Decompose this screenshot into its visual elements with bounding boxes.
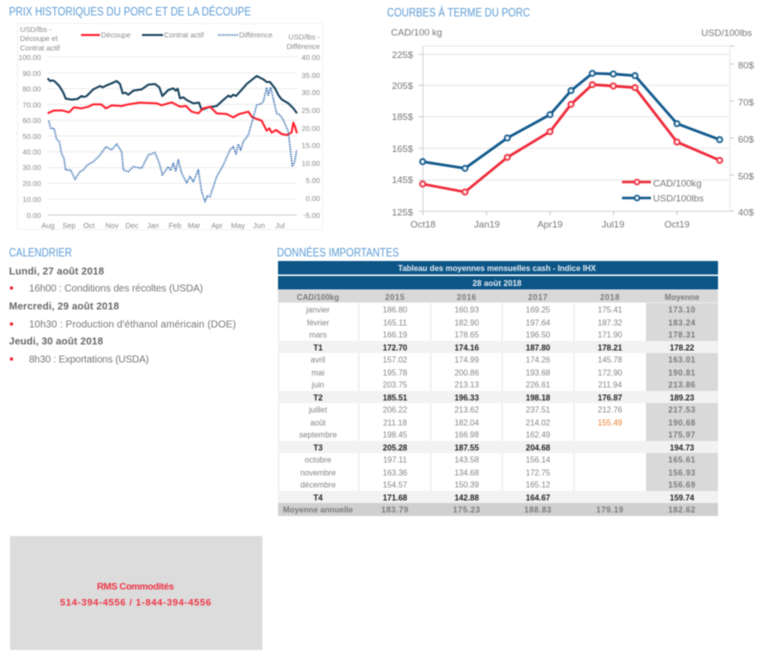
Q1 rows: 182.90 [454,318,479,328]
right axis labels: -5.00 [303,211,320,220]
table: moyennes mensuelles cash [278,261,718,516]
Q2 rows: 185.51 [383,394,408,402]
left axis labels: 205$ [392,81,414,92]
legend: CAD/100kg [653,178,702,190]
axis titles right [286,32,321,51]
Q2 rows: 174.26 [526,356,551,364]
Q1 rows: 187.32 [598,318,623,328]
Q1 rows: 178.31 [668,330,696,340]
Q2 rows [311,356,696,402]
left axis labels: 0.00 [27,211,41,220]
month labels: Jul19 [602,220,624,230]
axis titles left: USD/lbs - [20,25,52,34]
legend [622,178,704,204]
month labels: Jun [253,221,265,230]
Q3 rows: 212.76 [598,406,623,414]
Q4 rows: 165.61 [668,456,696,464]
calendar list: Lundi, 27 août 2018 [9,266,104,278]
legend: USD/100lbs [653,194,704,204]
Q2 rows: 200.86 [454,368,479,378]
Q1 rows: 197.64 [526,318,551,328]
Q1 rows: 166.19 [383,330,408,340]
header row: CAD/100kg [297,293,339,302]
month labels: Oct18 [410,220,436,230]
axis titles right: Différence [286,42,320,51]
heading: calendrier: CALENDRIER [9,248,72,260]
calendar list [9,266,236,366]
Q3 rows: août [310,418,327,428]
Q1 rows: 175.41 [598,306,623,314]
header row: 2018 [600,293,620,302]
left axis labels: 145$ [392,175,414,186]
Q4 rows: 156.69 [668,480,696,490]
Q4 rows: octobre [305,456,332,464]
Q4 rows: 143.58 [454,456,479,464]
Q4 rows: 159.74 [670,494,695,502]
Q4 rows [300,456,696,502]
Q3 rows: T3 [313,444,323,452]
Q2 rows: avril [311,356,326,364]
line: contrat actif [48,76,297,113]
Q2 rows: 174.99 [454,356,479,364]
month labels: Apr19 [537,220,563,230]
Q3 rows: 190.68 [668,418,696,428]
Q2 rows: 213.86 [668,380,696,390]
left axis labels: 70.00 [22,100,41,110]
Q3 rows: 187.55 [454,444,479,452]
Q1 rows: 172.70 [383,344,408,352]
left axis labels: 165$ [392,144,414,155]
Q2 rows: 176.87 [598,394,623,402]
right axis labels: 40$ [738,208,755,218]
Q3 rows: 214.02 [526,418,551,428]
left axis labels: 10.00 [22,195,41,204]
Q1 rows: 183.24 [668,318,696,328]
Q1 rows: 178.22 [670,344,695,352]
Q1 rows: 178.21 [598,344,623,352]
header row: 2016 [457,293,477,302]
left axis labels: 40.00 [22,148,41,156]
heading: prix historiques: PRIX HISTORIQUES DU PORC ET DE LA DÉCOUPE [9,6,251,18]
shaded rows and columns [278,290,718,516]
Q3 rows: 166.98 [454,430,479,440]
left axis labels: 20.00 [22,179,41,188]
Q2 rows: 172.90 [598,368,623,378]
month labels [410,220,690,230]
line: USD/100lbs [420,71,722,171]
Q2 rows: 190.81 [668,368,696,378]
Q3 rows: 205.28 [383,444,408,452]
month labels: Jul [275,221,285,230]
Q3 rows: 198.45 [383,430,408,440]
right axis labels: 5.00 [306,176,320,185]
header row: 2015 [385,293,405,302]
Q1 rows: 196.50 [526,330,551,340]
axis titles [391,28,752,39]
left axis labels: 125$ [392,208,414,218]
Q4 rows: 156.93 [668,468,696,478]
month labels: May [231,221,245,230]
chart: prix historiques du porc et de la découpe [18,24,322,230]
Q4 rows: 164.67 [526,494,551,502]
right axis labels [302,53,320,220]
annual average row: 182.62 [668,506,696,514]
Q3 rows: juillet [308,406,328,414]
calendar list: Jeudi, 30 août 2018 [9,336,103,348]
Q3 rows: 155.49 [598,418,623,428]
left axis labels: 30.00 [22,163,41,172]
annual average row: Moyenne annuelle [283,506,354,514]
right axis labels: 80$ [738,60,755,72]
axis titles left: Contrat actif [20,44,61,52]
left axis labels: 50.00 [22,132,41,141]
month labels: Mar [188,221,201,230]
left axis labels: 80.00 [22,84,41,94]
right axis labels [738,60,755,218]
Q4 rows: novembre [300,468,336,478]
axis titles left: Découpe et [20,34,58,43]
month labels: Jan19 [474,220,500,230]
month labels: Dec [125,221,139,230]
line: découpe [48,102,297,135]
Q2 rows: 198.18 [526,394,551,402]
Q2 rows: 226.61 [526,380,551,390]
line: différence [49,87,297,202]
Q2 rows: 213.13 [454,380,479,390]
legend: Différence [239,30,273,40]
right axis labels: 25.00 [302,106,320,115]
line: CAD/100kg [420,82,722,195]
annual average row: 179.19 [596,506,624,514]
Q1 rows: 171.90 [598,330,623,340]
Q1 rows: 178.65 [454,330,479,340]
Q3 rows: 211.18 [383,418,407,428]
Q3 rows: 217.53 [668,406,696,414]
annual average row: 188.83 [524,506,552,514]
left axis labels [392,50,414,218]
header row: 2017 [528,293,548,302]
Q3 rows: 204.68 [526,444,551,452]
left axis labels [18,53,41,220]
right axis labels: 30.00 [302,88,320,97]
axis titles left [20,25,61,52]
right axis labels: 15.00 [302,141,320,150]
Q1 rows: 187.80 [526,344,551,352]
Q4 rows: décembre [300,480,336,490]
Q1 rows: 169.25 [526,306,551,314]
axis titles: CAD/100 kg [391,28,442,38]
heading: courbes à terme: COURBES À TERME DU PORC [387,6,530,20]
right axis labels: 10.00 [302,159,320,168]
Q1 rows: 174.16 [454,344,479,352]
Q3 rows: 206.22 [383,406,408,414]
Q1 rows: 160.93 [454,306,479,314]
Q2 rows: mai [312,368,325,378]
month labels: Oct [83,221,95,230]
contact box: RMS Commodités [97,582,174,592]
right axis labels: 0.00 [306,194,320,203]
legend: Découpe [101,30,131,40]
Q2 rows: 203.75 [383,380,408,390]
Q3 rows: 175.97 [668,430,696,440]
left axis labels: 60.00 [22,116,41,125]
right axis labels: 70$ [738,98,755,108]
Q1 rows: janvier [305,306,330,314]
Q4 rows: 150.39 [454,480,479,490]
Q4 rows: 171.68 [383,494,408,502]
Q4 rows: 197.11 [383,456,407,464]
axis titles right: USD/lbs - [288,32,321,42]
Q2 rows: 211.94 [598,380,622,390]
month labels: Jan [147,221,159,230]
Q3 rows: 213.62 [454,406,479,414]
Q1 rows: mars [309,330,327,340]
Q3 rows [299,406,696,452]
Q4 rows: 154.57 [383,480,408,490]
chart: courbes à terme du porc [391,28,755,230]
Q3 rows: 182.04 [454,418,479,428]
Q2 rows: 196.33 [454,394,479,402]
Q2 rows: 163.01 [668,356,696,364]
header row: Moyenne [665,293,700,302]
Q4 rows: 165.12 [526,480,551,490]
Q1 rows: février [307,318,329,328]
Q3 rows: 194.73 [670,444,695,452]
contact box [10,536,262,650]
annual average row [283,506,696,514]
left axis labels: 100.00 [18,53,41,62]
calendar list: 10h30 : Production d'éthanol américain (DOE) [29,320,236,330]
contact box: 514-394-4556 / 1-844-394-4556 [60,598,211,608]
Q3 rows: 162.49 [526,430,551,440]
month labels: Oct19 [664,220,690,230]
right axis labels: 50$ [738,172,755,182]
Q2 rows: juin [311,380,324,390]
Q4 rows: 156.14 [526,456,551,464]
Q2 rows: 189.23 [670,394,695,402]
table title bars [278,261,718,290]
month labels: Aug [41,221,55,230]
legend: Contrat actif [164,30,205,40]
Q2 rows: 195.78 [383,368,408,378]
Q1 rows [305,306,696,352]
right axis labels: 35.00 [302,71,320,80]
Q3 rows: 237.51 [526,406,551,414]
month labels: Sep [62,221,76,230]
left axis labels: 90.00 [22,69,41,78]
Q4 rows: 142.88 [454,494,479,502]
annual average row: 175.23 [453,506,480,514]
calendar list: Mercredi, 29 août 2018 [9,302,119,312]
calendar list: 16h00 : Conditions des récoltes (USDA) [29,284,203,294]
left axis labels: 225$ [392,50,414,61]
right axis labels: 60$ [738,134,755,146]
month labels: Apr [211,221,223,230]
Q1 rows: 173.10 [668,306,696,314]
Q4 rows: T4 [313,494,323,502]
Q2 rows: 157.02 [383,356,408,364]
left axis labels: 185$ [392,112,414,123]
right axis labels: 20.00 [302,124,320,133]
month labels: Nov [105,221,119,230]
Q1 rows: 165.11 [383,318,407,328]
Q3 rows: septembre [299,430,337,440]
header row [297,293,700,302]
table title bars: Tableau des moyennes mensuelles cash - Indice IHX [398,264,597,273]
month labels [41,221,285,230]
legend [81,30,273,40]
table title bars: 28 août 2018 [472,279,522,288]
Q2 rows: 145.78 [598,356,623,364]
right axis labels: 40.00 [302,53,320,62]
month labels: Feb [169,221,181,230]
axis titles: USD/100lbs [701,28,752,39]
Q4 rows: 163.36 [383,468,408,478]
annual average row: 183.79 [381,506,409,514]
heading: données importantes: DONNÉES IMPORTANTES [277,246,399,260]
Q1 rows: T1 [313,344,323,352]
Q4 rows: 172.75 [526,468,551,478]
Q2 rows: 193.68 [526,368,551,378]
Q1 rows: 186.80 [383,306,408,314]
Q4 rows: 134.68 [454,468,479,478]
calendar list: 8h30 : Exportations (USDA) [29,354,149,366]
Q2 rows: T2 [313,394,323,402]
